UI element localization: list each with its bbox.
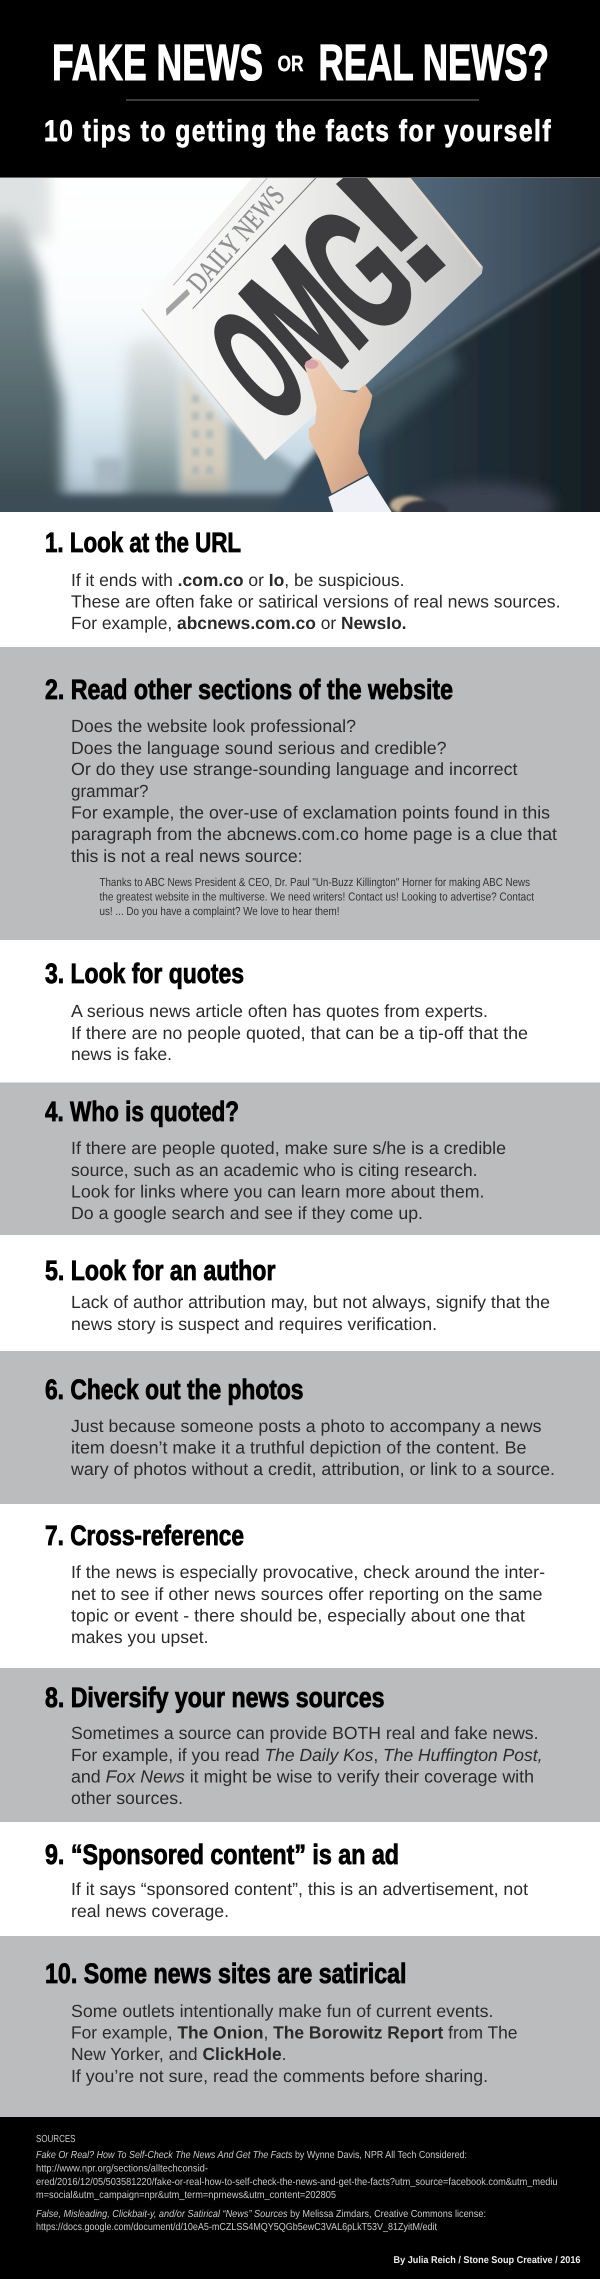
tip 9 heading: 9. “Sponsored content” is an ad	[45, 1839, 399, 1870]
headline OMG!: M	[210, 213, 398, 423]
tip 6 text: item doesn’t make it a truthful depiction of the content. Be	[71, 1438, 526, 1458]
tip 4 text: source, such as an academic who is citing research.	[71, 1160, 478, 1180]
tip 10 text: New Yorker, and ClickHole.	[71, 2044, 287, 2064]
tip 7 text: If the news is especially provocative, check around the inter-	[71, 1562, 545, 1582]
masthead DAILY NEWS: DAILY NEWS	[181, 180, 291, 299]
tip 4 text	[71, 1138, 506, 1223]
sources: m=social&utm_campaign=npr&utm_term=nprnews&utm_content=202805	[36, 2190, 336, 2201]
headline OMG!: !	[300, 129, 484, 321]
tip 2 text: Or do they use strange-sounding language and incorrect	[71, 759, 518, 779]
tip 1 text: If it ends with .com.co or Io, be suspicious.	[71, 570, 404, 590]
tip 6 heading: 6. Check out the photos	[45, 1374, 304, 1405]
tip 8 heading: 8. Diversify your news sources	[45, 1682, 384, 1713]
headline OMG!	[214, 178, 446, 416]
newspaper	[142, 178, 483, 460]
tip 6 panel	[0, 1351, 600, 1504]
hand	[304, 358, 392, 512]
tip 3 text: If there are no people quoted, that can be a tip-off that the	[71, 1023, 528, 1043]
tip 10 text: For example, The Onion, The Borowitz Report from The	[71, 2022, 518, 2042]
tip 5 text: Lack of author attribution may, but not always, signify that the	[71, 1292, 550, 1312]
quoted abcnews paragraph: the greatest website in the multiverse. We need writers! Contact us! Looking to advertise? Contact	[100, 890, 535, 904]
title: OR	[278, 51, 304, 76]
sources: https://docs.google.com/document/d/10eA5-mCZLSS4MQY5QGb5ewC3VAL6pLkT53V_81ZyitM/edit	[36, 2222, 437, 2233]
sources: Fake Or Real? How To Self-Check The News And Get The Facts by Wynne Davis, NPR All Tech Considered:	[36, 2150, 467, 2161]
tip 10 heading: 10. Some news sites are satirical	[45, 1958, 406, 1989]
title: FAKE NEWS	[52, 34, 263, 91]
tip 4 text: If there are people quoted, make sure s/he is a credible	[71, 1138, 506, 1158]
tip 2 text: paragraph from the abcnews.com.co home page is a clue that	[71, 824, 557, 844]
tip 7 panel	[0, 1504, 600, 1668]
tip 8 text	[71, 1723, 542, 1808]
tip 8 text: Sometimes a source can provide BOTH real and fake news.	[71, 1723, 538, 1743]
tip 1 text	[71, 570, 560, 633]
tip 5 text: news story is suspect and requires verification.	[71, 1314, 437, 1334]
tip 8 text: For example, if you read The Daily Kos, The Huffington Post,	[71, 1745, 542, 1765]
tip 10 text: If you’re not sure, read the comments before sharing.	[71, 2066, 488, 2086]
tip 2 panel	[0, 647, 600, 940]
tip 9 text: real news coverage.	[71, 1901, 229, 1921]
tip 7 text: topic or event - there should be, especially about one that	[71, 1606, 525, 1626]
tip 10 text: Some outlets intentionally make fun of current events.	[71, 2001, 494, 2021]
tip 1 heading: 1. Look at the URL	[45, 527, 241, 558]
tip 2 text: this is not a real news source:	[71, 846, 302, 866]
header band	[0, 0, 600, 177]
sources: ered/2016/12/05/503581220/fake-or-real-how-to-self-check-the-news-and-get-the-facts?utm_source=facebook.com&utm_mediu	[36, 2177, 558, 2188]
tip 4 heading: 4. Who is quoted?	[45, 1096, 239, 1127]
sources: SOURCES	[36, 2134, 76, 2145]
tip 7 text	[71, 1562, 545, 1647]
tip 5 heading: 5. Look for an author	[45, 1255, 276, 1286]
tip 9 text	[71, 1879, 528, 1921]
tip 7 text: makes you upset.	[71, 1627, 208, 1647]
tip 2 text	[71, 716, 557, 866]
tip 10 panel	[0, 1936, 600, 2117]
tip 6 text: wary of photos without a credit, attribution, or link to a source.	[70, 1459, 555, 1479]
tip 4 text: Look for links where you can learn more about them.	[71, 1182, 484, 1202]
tip 3 heading: 3. Look for quotes	[45, 958, 244, 989]
tip 2 text: Does the language sound serious and credible?	[71, 738, 447, 758]
tip 4 panel	[0, 1082, 600, 1235]
quoted abcnews paragraph: Thanks to ABC News President & CEO, Dr. Paul "Un-Buzz Killington" Horner for making ABC News	[100, 876, 530, 889]
title	[52, 34, 549, 91]
sources: False, Misleading, Clickbait-y, and/or Satirical “News” Sources by Melissa Zimdars, Creative Commons license:	[36, 2209, 486, 2220]
tip 2 heading: 2. Read other sections of the website	[45, 674, 453, 705]
credit line: By Julia Reich / Stone Soup Creative / 2016	[394, 2255, 581, 2266]
tip 8 panel	[0, 1668, 600, 1822]
sources: http://www.npr.org/sections/alltechconsid-	[36, 2164, 208, 2174]
headline OMG!: G	[264, 172, 452, 370]
tip 3 panel	[0, 940, 600, 1082]
tip 6 text: Just because someone posts a photo to accompany a news	[71, 1416, 542, 1436]
tip 3 text	[71, 1001, 528, 1064]
tip 3 text: A serious news article often has quotes from experts.	[71, 1001, 488, 1021]
tip 10 text	[71, 2001, 518, 2086]
tip 9 panel	[0, 1822, 600, 1936]
tip 1 text: These are often fake or satirical versions of real news sources.	[71, 592, 560, 612]
headline OMG!: O	[180, 275, 337, 455]
quoted abcnews paragraph: us! ... Do you have a complaint? We love to hear them!	[100, 905, 340, 918]
tip 3 text: news is fake.	[71, 1044, 172, 1064]
tip 1 panel	[0, 512, 600, 647]
tip 5 panel	[0, 1235, 600, 1351]
tip 8 text: other sources.	[71, 1788, 183, 1808]
tip 7 heading: 7. Cross-reference	[45, 1520, 244, 1551]
tip 2 text: grammar?	[71, 781, 149, 801]
tip 9 text: If it says “sponsored content”, this is an advertisement, not	[71, 1879, 528, 1899]
quoted abcnews paragraph	[100, 876, 535, 918]
tip 2 text: For example, the over-use of exclamation points found in this	[71, 802, 550, 822]
tip 5 text	[71, 1292, 550, 1334]
footer panel	[0, 2117, 600, 2279]
tip 8 text: and Fox News it might be wise to verify their coverage with	[71, 1766, 534, 1786]
tip 7 text: net to see if other news sources offer reporting on the same	[71, 1584, 542, 1604]
building windows	[192, 395, 213, 474]
tip 6 text	[70, 1416, 555, 1479]
tip 2 text: Does the website look professional?	[71, 716, 356, 736]
sources	[36, 2134, 558, 2233]
hero photo: hand holding OMG newspaper	[0, 178, 600, 512]
tip 1 text: For example, abcnews.com.co or NewsIo.	[71, 613, 406, 633]
tip 4 text: Do a google search and see if they come up.	[71, 1203, 423, 1223]
